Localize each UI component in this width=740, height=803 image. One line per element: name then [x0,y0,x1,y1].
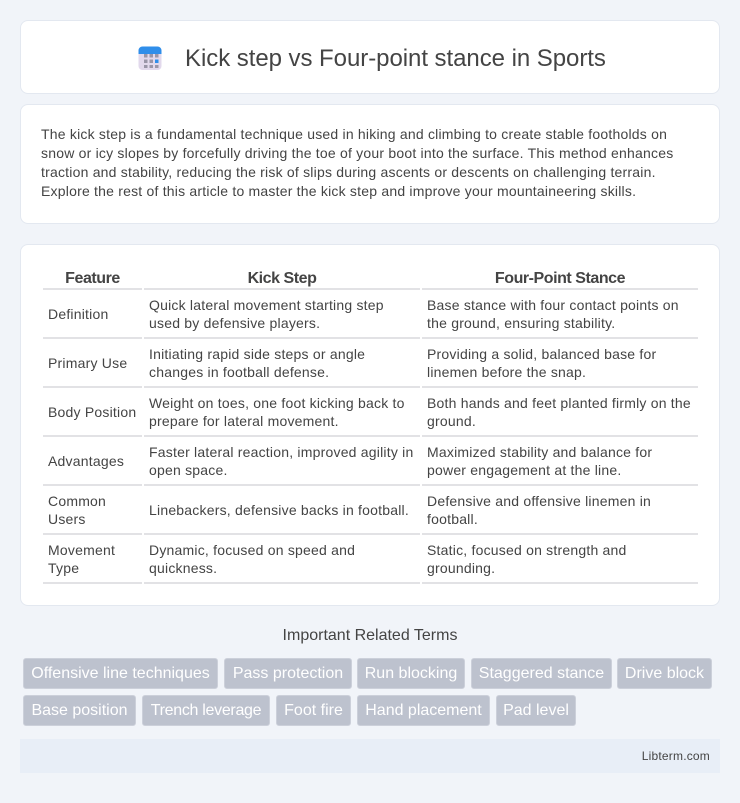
tag: Drive block [625,665,704,682]
row: advantages: open space. [149,462,228,478]
row: common users: football. [427,511,478,527]
tag [496,695,576,726]
row: body position: Weight on toes, one foot kicking back to [149,395,405,411]
footer bar [20,739,720,773]
table header: Kick Step [248,270,316,287]
row: advantages: power engagement at the line. [427,462,621,478]
tag: Pad level [503,702,569,719]
row: primary use: Providing a solid, balanced base for [427,346,656,362]
related terms tags [23,658,712,726]
intro text: snow or icy slopes by forcefully driving the toe of your boot into the surface. This method enhances [41,145,673,161]
tag: Offensive line techniques [31,665,210,682]
row: advantages: Advantages [48,453,124,469]
row: primary use: Primary Use [48,355,127,371]
title panel [20,20,720,94]
tag: Run blocking [365,665,457,682]
tag [23,658,218,689]
related terms heading: Important Related Terms [283,627,457,644]
row: common users [48,493,651,527]
row: common users: Linebackers, defensive backs in football. [149,502,409,518]
tag [617,658,712,689]
row: movement type: Type [48,560,79,576]
tag: Pass protection [233,665,343,682]
comparison table panel [20,244,720,606]
intro text: Explore the rest of this article to master the kick step and improve your mountaineering skills. [41,183,636,199]
tag [471,658,612,689]
row: advantages: Faster lateral reaction, improved agility in [149,444,413,460]
tag: Trench leverage [151,702,261,719]
tag: Base position [31,702,128,719]
row: primary use: linemen before the snap. [427,364,586,380]
tag [23,695,136,726]
icon: calendar [138,46,162,70]
row: body position: ground. [427,413,476,429]
title: Kick step vs Four-point stance in Sports [185,45,606,72]
row: common users: Users [48,511,86,527]
table header: Four-Point Stance [495,270,625,287]
row: movement type: Static, focused on strength and [427,542,627,558]
tag: Staggered stance [479,665,604,682]
row: definition: Quick lateral movement starting step [149,297,384,313]
row: movement type: Dynamic, focused on speed and [149,542,355,558]
row: movement type [48,542,627,576]
row: body position: Body Position [48,404,136,420]
tag [276,695,351,726]
intro text: traction and stability, reducing the risk of slips during ascents or descents on challenging terrain. [41,164,656,180]
tag: Foot fire [284,702,343,719]
intro panel [20,104,720,224]
intro text: The kick step is a fundamental technique used in hiking and climbing to create stable footholds on [41,126,667,142]
row: primary use [48,346,656,380]
tag: Hand placement [365,702,482,719]
row: definition: the ground, ensuring stability. [427,315,615,331]
row: body position [48,395,691,429]
table header [65,270,625,287]
tag [357,695,490,726]
row: movement type: Movement [48,542,115,558]
row: definition [48,297,679,331]
row: advantages: Maximized stability and balance for [427,444,652,460]
row: primary use: Initiating rapid side steps or angle [149,346,365,362]
row: primary use: changes in football defense. [149,364,329,380]
row: body position: Both hands and feet planted firmly on the [427,395,691,411]
row: body position: prepare for lateral movement. [149,413,339,429]
tag [224,658,352,689]
row: common users: Defensive and offensive linemen in [427,493,651,509]
row: definition: Base stance with four contact points on [427,297,679,313]
row: movement type: grounding. [427,560,495,576]
tag [142,695,270,726]
row: advantages [48,444,652,478]
row: common users: Common [48,493,106,509]
row: movement type: quickness. [149,560,217,576]
row: definition: used by defensive players. [149,315,320,331]
intro text [41,126,673,199]
row: definition: Definition [48,306,108,322]
table header: Feature [65,270,120,287]
footer credit: Libterm.com [642,749,710,763]
tag [357,658,465,689]
